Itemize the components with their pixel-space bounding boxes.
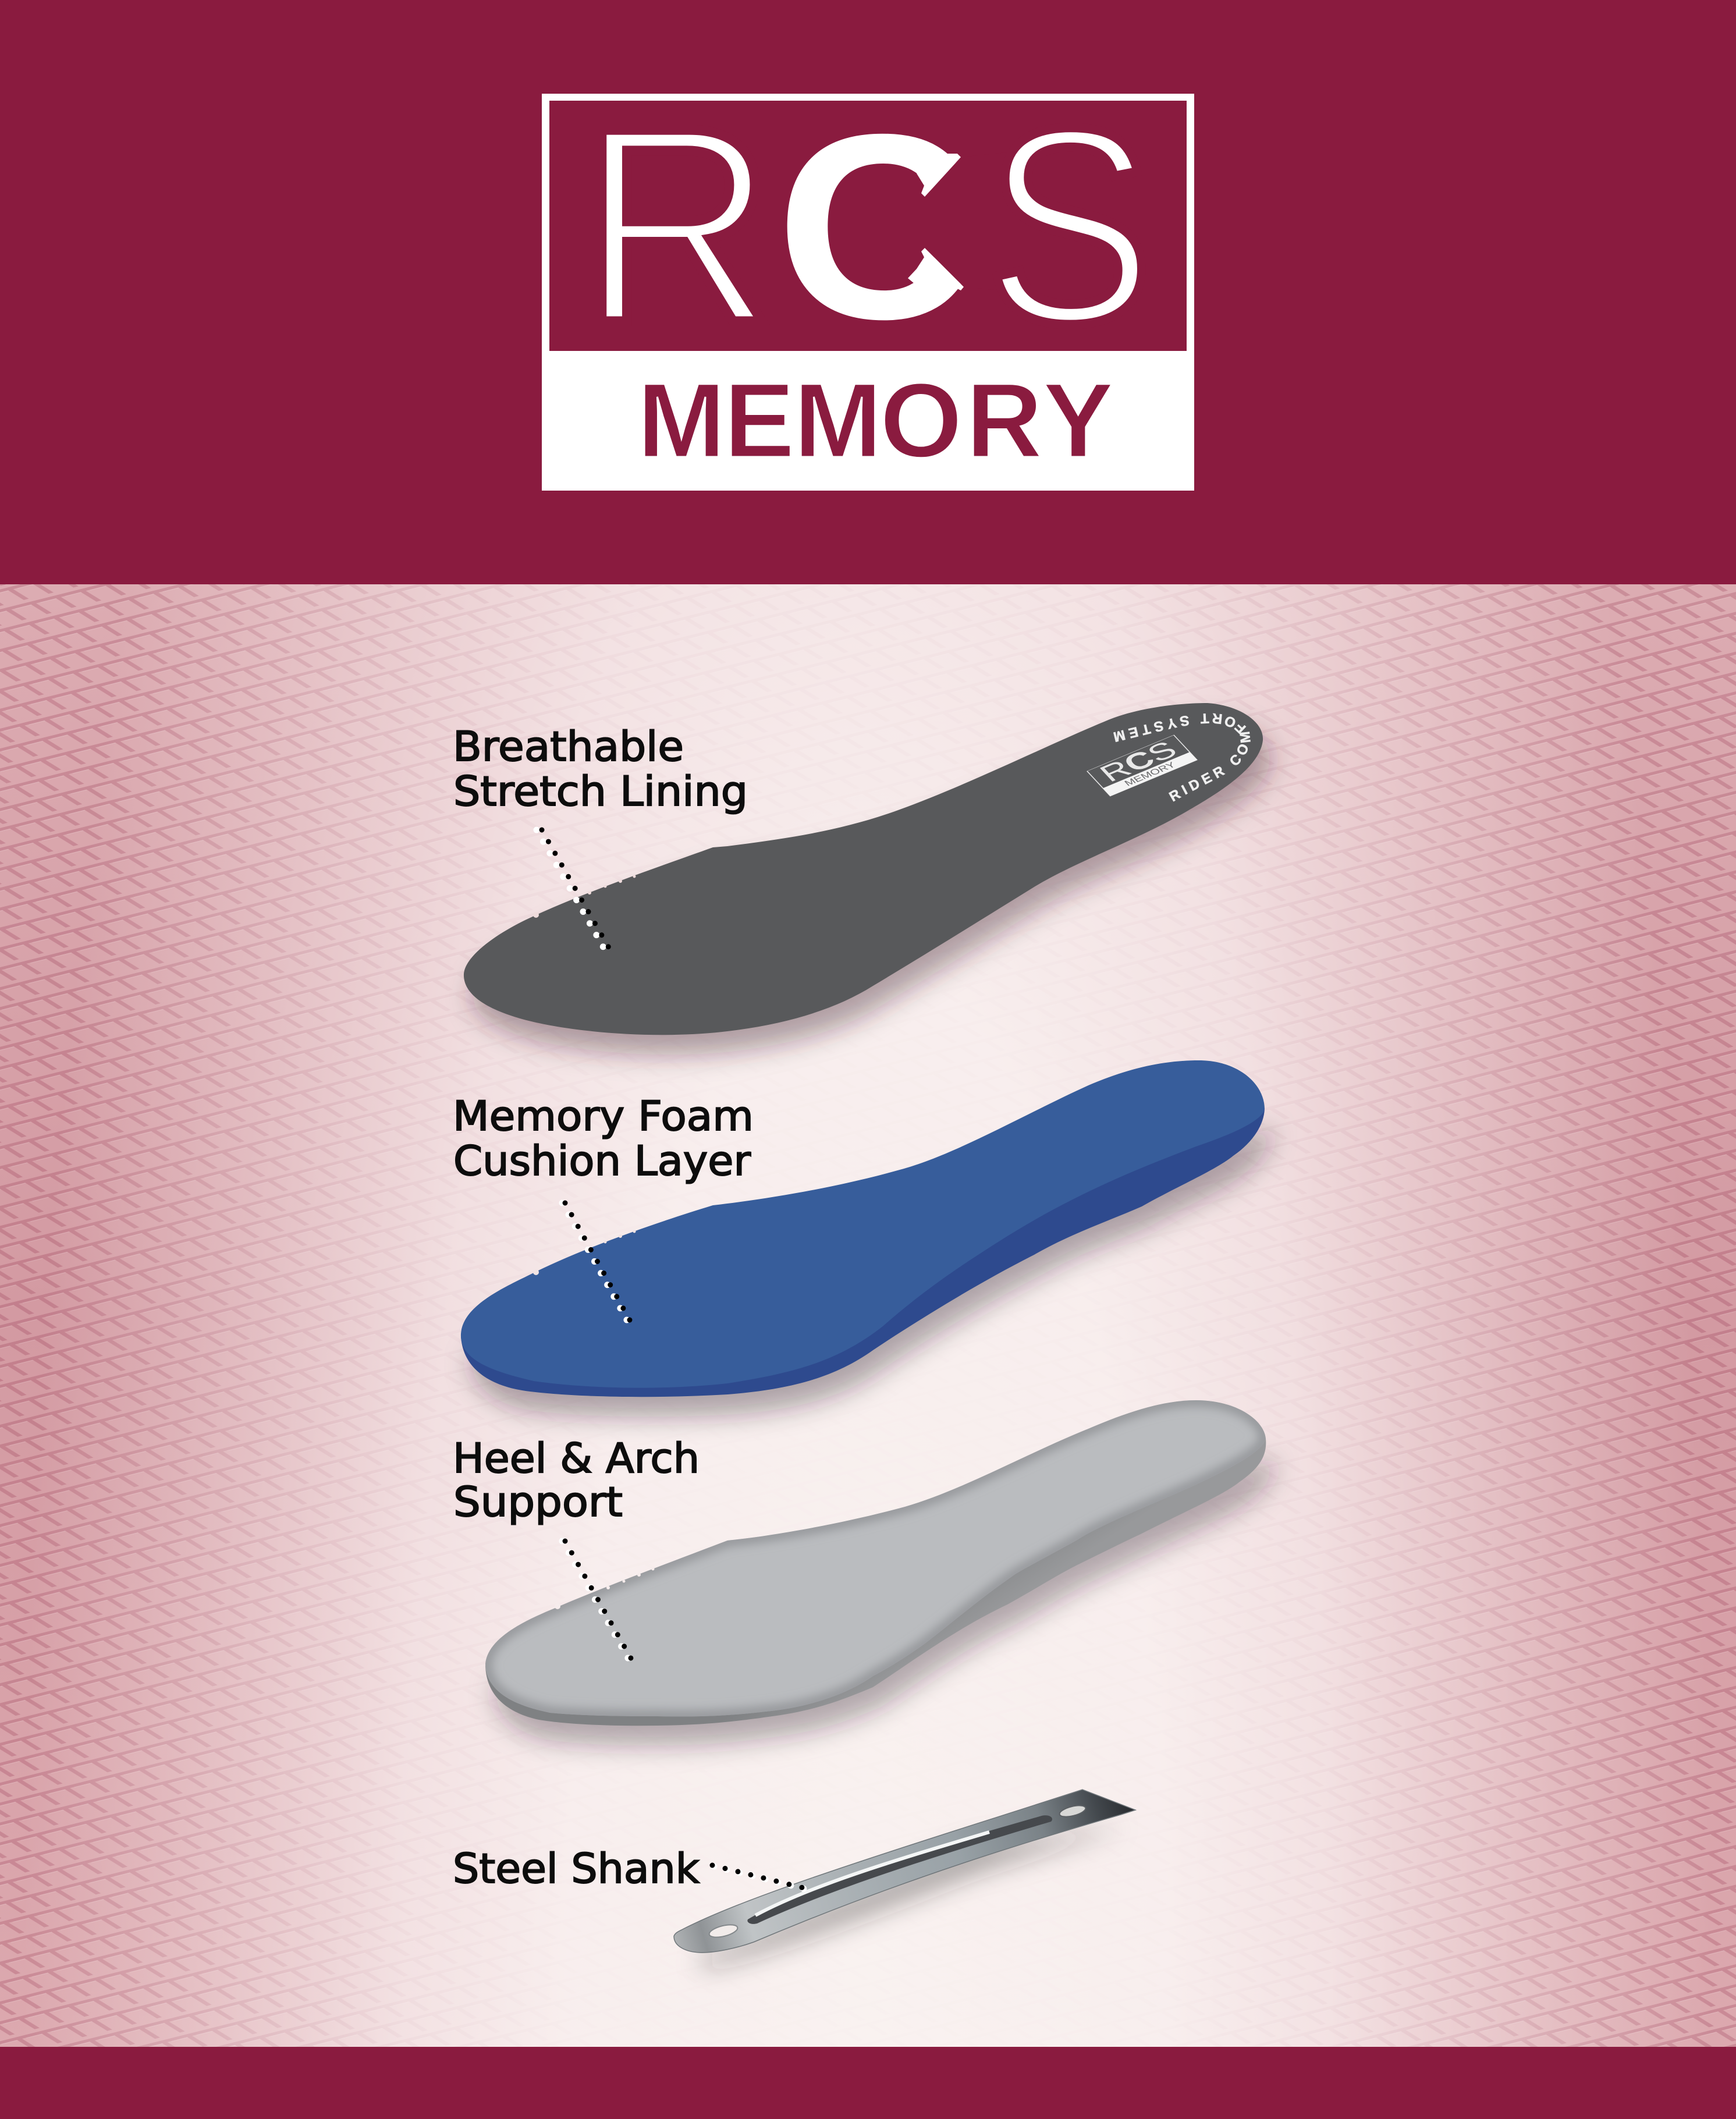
logo letter C: C (776, 79, 978, 374)
toe notches (533, 875, 636, 918)
insole layer: breathable stretch lining (459, 703, 1284, 1071)
label: memory foam cushion layer: Memory Foam (453, 1092, 754, 1140)
patterned background panel (0, 584, 1736, 2047)
insole print: RCS memory stamp (1085, 733, 1197, 796)
logo letter S: S (986, 70, 1153, 381)
insole layer: heel and arch support (485, 1400, 1274, 1745)
leader dots: support (562, 1541, 631, 1659)
label: heel and arch support: Support (453, 1478, 623, 1526)
logo word MEMORY: MEMORY (637, 361, 1113, 480)
label: breathable stretch lining: Breathable (453, 723, 684, 771)
toe notches (555, 1568, 654, 1609)
insole print: RCS memory stamp: MEMORY (1122, 760, 1177, 787)
label: steel shank: Steel Shank (453, 1845, 700, 1893)
label: memory foam cushion layer: Cushion Layer (453, 1137, 751, 1185)
insole print: rider comfort system: RIDER COMFORT SYSTEM (1113, 714, 1251, 802)
logo letter R: R (580, 70, 775, 381)
label: heel and arch support (453, 1435, 700, 1526)
label: memory foam cushion layer (453, 1092, 754, 1185)
footer band (0, 2047, 1736, 2119)
leader dots: lining (537, 830, 609, 947)
logo: RCS Memory (542, 70, 1194, 491)
label: breathable stretch lining: Stretch Lining (453, 768, 748, 815)
steel shank (674, 1790, 1135, 1968)
insole layer: memory foam cushion (461, 1060, 1273, 1417)
label: heel and arch support: Heel & Arch (453, 1435, 700, 1482)
shank slot (747, 1815, 1052, 1924)
leader dots: foam (562, 1203, 630, 1321)
label: breathable stretch lining (453, 723, 748, 815)
toe notches (533, 1230, 636, 1275)
insole print: RCS memory stamp: RCS (1094, 736, 1183, 787)
header band (0, 0, 1736, 584)
shank holes (708, 1922, 739, 1940)
leader dots: shank (712, 1865, 804, 1889)
